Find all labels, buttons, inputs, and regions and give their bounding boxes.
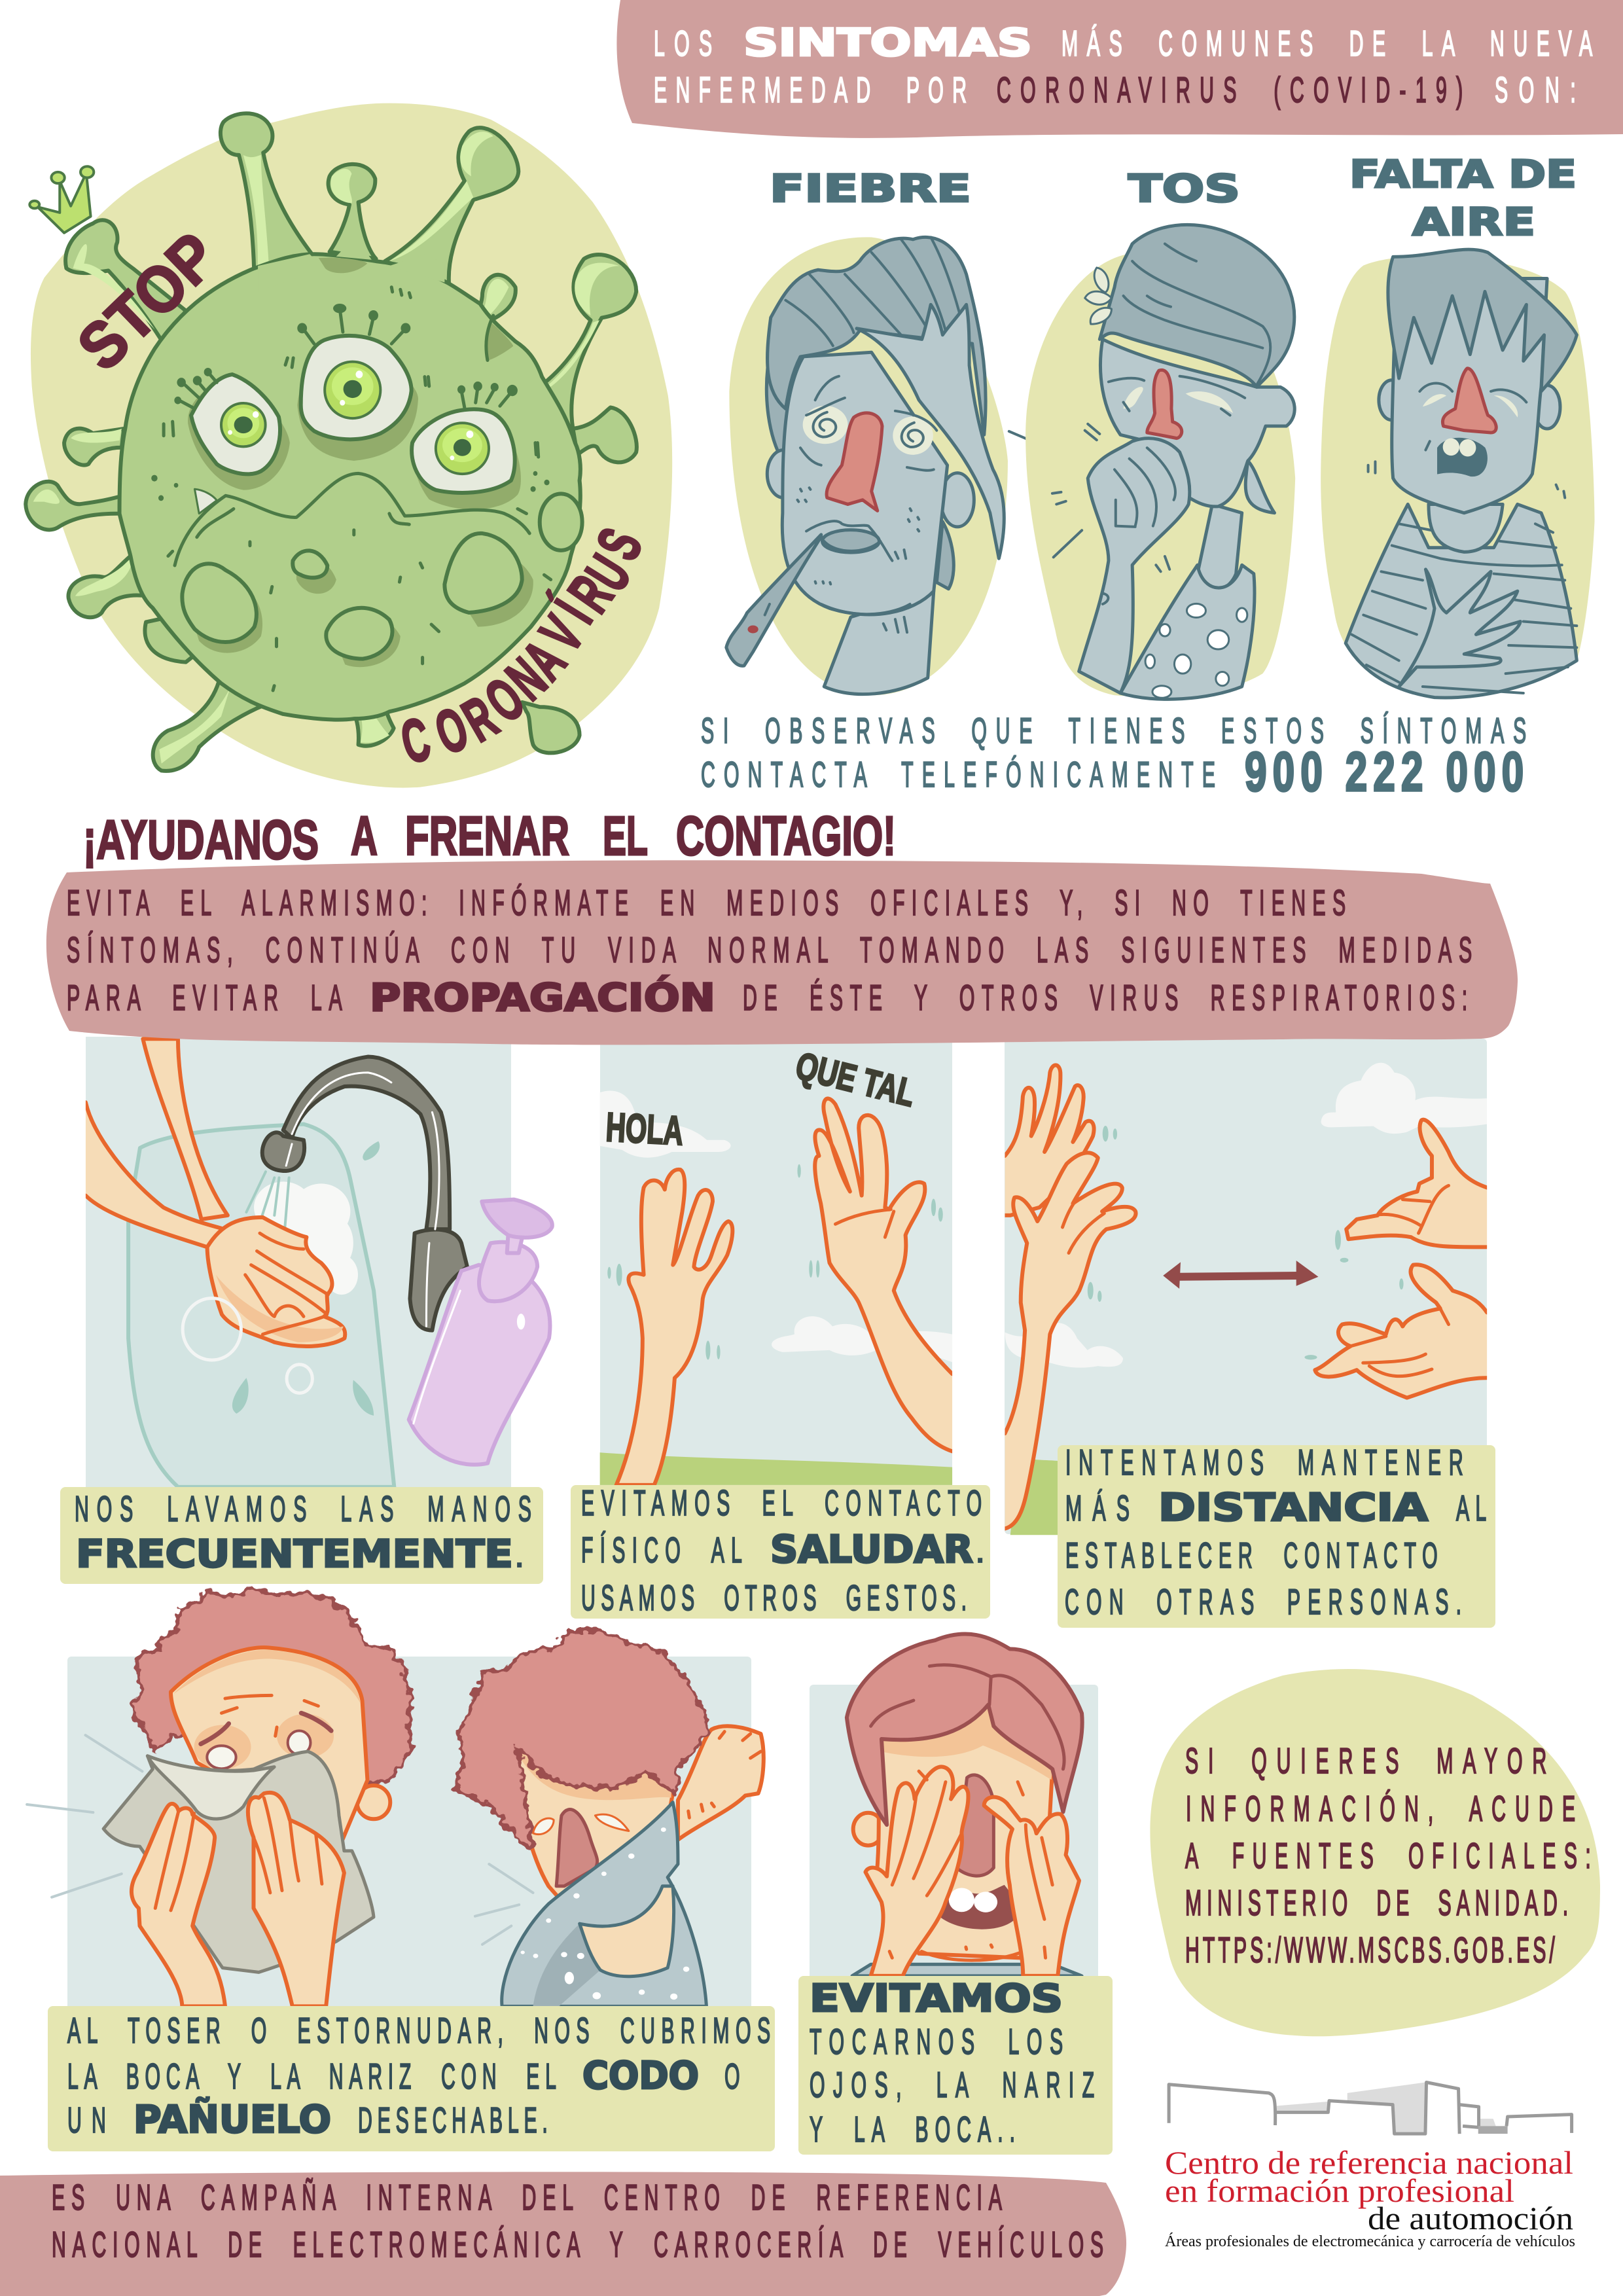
caption: evitamos el contacto: . xyxy=(975,1530,985,1570)
heading: fiebre: FIEBRE xyxy=(770,166,971,211)
caption: toser xyxy=(48,2006,775,2151)
eyelashes xyxy=(174,304,518,408)
title: CORONAVIRUS: O xyxy=(473,665,537,736)
panel: symptom faces xyxy=(726,224,1595,699)
call to action xyxy=(701,711,1526,802)
caption: distancia xyxy=(1058,1443,1495,1628)
palm line xyxy=(835,1210,894,1237)
person two fist lines xyxy=(688,1732,760,1818)
title: CORONAVIRUS xyxy=(395,519,655,777)
spiral eyes xyxy=(803,406,933,455)
title: STOP: STOP xyxy=(64,219,232,384)
info text: MINISTERIO DE SANIDAD. xyxy=(1185,1884,1568,1923)
lower arm xyxy=(76,1102,224,1247)
grass xyxy=(1010,1457,1069,1535)
clouds xyxy=(600,1091,952,1362)
speed lines xyxy=(27,1735,533,1945)
header line two: CORONAVIRUS (COVID-19) xyxy=(997,71,1463,110)
info text: HTTPS:/WWW.MSCBS.GOB.ES/ xyxy=(1185,1931,1555,1970)
foam xyxy=(254,1181,358,1295)
bubbles xyxy=(183,1299,312,1393)
dress xyxy=(1120,565,1255,699)
caption: toser: DESECHABLE. xyxy=(358,2101,548,2140)
breath marks xyxy=(1368,441,1565,497)
banner shape xyxy=(0,2172,1126,2296)
person one eyes xyxy=(194,1695,334,1769)
virus mouth fold xyxy=(168,509,526,556)
eye shadows xyxy=(188,344,521,509)
hair tail xyxy=(1245,461,1274,513)
panel: saludar xyxy=(571,1041,990,1619)
heading: ayudanos a frenar: EL xyxy=(603,805,648,867)
wash illustration xyxy=(76,1039,552,1487)
caption: lavamos las manos: NOS LAVAMOS LAS MANOS xyxy=(75,1490,531,1529)
hand on forehead xyxy=(857,304,1004,558)
shirt arm shadow xyxy=(533,1924,600,2006)
virus background blob xyxy=(31,103,672,788)
ears xyxy=(1379,380,1560,429)
person two nose xyxy=(556,1810,597,1886)
symptom headings xyxy=(770,152,1577,244)
virus freckles xyxy=(151,471,550,501)
right top hand lines xyxy=(1380,1185,1448,1233)
double arrow xyxy=(1163,1261,1318,1289)
title: CORONAVIRUS: R xyxy=(556,564,626,624)
title: CORONAVIRUS: A xyxy=(510,628,579,692)
arms and hands clipped to panel xyxy=(993,1065,1495,1529)
blob shape xyxy=(1150,1669,1600,2036)
nose xyxy=(956,1775,993,1876)
washing hands xyxy=(207,1217,345,1346)
virus tooth xyxy=(194,489,217,514)
logo xyxy=(1165,2082,1575,2250)
ear xyxy=(853,1813,883,1846)
cough illustration xyxy=(27,1588,764,2006)
panel: evitar tocarse xyxy=(798,1634,1113,2155)
virus mouth xyxy=(175,473,529,565)
hair xyxy=(768,237,986,435)
nose xyxy=(1442,368,1496,433)
person two face xyxy=(512,1736,673,1928)
panel: lavado de manos xyxy=(60,1037,552,1584)
faucet xyxy=(262,1057,467,1331)
banner text line one: EVITA EL ALARMISMO: INFÓRMATE EN MEDIOS OFICIALES Y, SI NO TIENES xyxy=(67,884,1346,923)
sink xyxy=(128,1124,394,1487)
neck xyxy=(1429,504,1503,552)
logo text: de automoción xyxy=(1368,2200,1573,2236)
logo building xyxy=(1169,2082,1572,2134)
shirt xyxy=(1346,504,1577,698)
caption: distancia: DISTANCIA xyxy=(1158,1485,1428,1530)
logo text: Centro de referencia nacional xyxy=(1165,2144,1573,2181)
finger lines xyxy=(892,1782,1052,1919)
caption: evitamos tocarnos: Y LA BOCA.. xyxy=(810,2110,1015,2149)
eyes xyxy=(1419,384,1526,418)
mouth xyxy=(938,1885,1017,1929)
freckles xyxy=(797,488,919,632)
title: CORONAVIRUS: U xyxy=(573,544,644,602)
face marks xyxy=(889,1771,1046,1958)
thermometer xyxy=(726,535,821,666)
hair strands xyxy=(785,238,969,352)
heading: ayudanos a frenar xyxy=(83,805,896,870)
person two raised arm xyxy=(678,1726,764,1840)
head xyxy=(782,352,948,615)
banner text line three: PROPAGACIÓN xyxy=(370,975,715,1020)
caption: distancia: MÁS xyxy=(1065,1489,1130,1528)
greeting illustration xyxy=(600,1091,964,1485)
virus spikes xyxy=(26,113,637,771)
caption: evitamos el contacto: SALUDAR xyxy=(770,1527,973,1571)
header line one: LOS xyxy=(654,24,712,63)
right hand xyxy=(815,1098,964,1451)
right eye xyxy=(412,409,515,493)
hand on chest xyxy=(1399,569,1520,687)
hair xyxy=(1388,249,1577,391)
head xyxy=(1100,339,1294,507)
heading: ayudanos a frenar: FRENAR xyxy=(405,805,569,867)
caption: evitamos tocarnos: TOCARNOS LOS xyxy=(810,2022,1063,2062)
hair xyxy=(1099,224,1294,387)
virus surface marks xyxy=(164,287,551,691)
back hand xyxy=(998,1065,1094,1215)
title: CORONAVIRUS: R xyxy=(452,683,508,755)
person two shirt xyxy=(502,1803,706,2006)
virus bump xyxy=(540,493,582,550)
caption: toser: PAÑUELO xyxy=(134,2096,331,2142)
banner line two: NACIONAL DE ELECTROMECÁNICA Y CARROCERÍA DE VEHÍCULOS xyxy=(52,2225,1103,2265)
background blob xyxy=(1026,253,1295,697)
crown xyxy=(29,166,94,233)
face xyxy=(876,1705,1052,1958)
caption: evitamos el contacto: EVITAMOS EL CONTACTO xyxy=(581,1484,982,1523)
banner line one: ES UNA CAMPAÑA INTERNA DEL CENTRO DE REFERENCIA xyxy=(52,2177,1002,2217)
caption: evitamos el contacto xyxy=(571,1484,990,1619)
caption: distancia: CON OTRAS PERSONAS. xyxy=(1065,1583,1461,1622)
person one forehead shadow xyxy=(173,1650,360,1703)
logo text: Áreas profesionales de electromecánica y carrocería de vehículos xyxy=(1165,2233,1575,2250)
info text: A FUENTES OFICIALES: xyxy=(1185,1837,1591,1876)
title: CORONAVIRUS: N xyxy=(494,645,559,713)
mouth xyxy=(1438,438,1487,476)
left hand xyxy=(865,1767,968,1976)
banner text line three: PARA EVITAR LA xyxy=(67,978,342,1018)
header line one: MÁS COMUNES DE LA NUEVA xyxy=(1061,24,1593,63)
title: CORONAVIRUS: V xyxy=(527,605,597,663)
finger lines xyxy=(245,1233,328,1335)
front hand and arm xyxy=(993,1153,1136,1529)
heading: ayudanos a frenar: CONTAGIO! xyxy=(676,805,896,867)
center eye xyxy=(301,336,412,439)
right bottom hand xyxy=(1315,1265,1495,1398)
motion marks xyxy=(607,1164,943,1359)
left eye xyxy=(191,374,280,474)
right top hand xyxy=(1346,1120,1495,1247)
virus eyes xyxy=(174,304,521,509)
person one face xyxy=(171,1647,367,1842)
header line two: ENFERMEDAD POR xyxy=(654,71,967,110)
panel background xyxy=(1005,1039,1487,1534)
chin xyxy=(921,1952,1023,1960)
water streams xyxy=(246,1172,289,1259)
caption: evitamos el contacto: USAMOS OTROS GESTOS. xyxy=(581,1579,967,1618)
title: CORONAVIRUS: C xyxy=(395,705,437,777)
person one right hand xyxy=(248,1793,344,2006)
cough line xyxy=(1009,431,1076,460)
eyes closed xyxy=(1109,376,1245,415)
banner shape xyxy=(616,0,1623,138)
text: contacta: CONTACTA TELEFÓNICAMENTE xyxy=(701,755,1215,795)
panel background xyxy=(67,1657,751,2010)
mouth xyxy=(806,521,892,561)
finger lines xyxy=(1063,1202,1104,1253)
person one finger lines xyxy=(155,1798,322,1910)
forehead shadow xyxy=(883,1705,1052,1780)
caption: evitamos tocarnos: EVITAMOS xyxy=(810,1976,1063,2020)
text: si observas: SI OBSERVAS QUE TIENES ESTOS SÍNTOMAS xyxy=(701,711,1526,751)
neck xyxy=(1198,504,1242,590)
ears and back hair xyxy=(766,348,974,589)
panel: distancia xyxy=(993,1039,1495,1628)
person two neckline xyxy=(580,1886,674,1977)
face touching illustration xyxy=(847,1634,1082,1976)
caption: distancia: ESTABLECER CONTACTO xyxy=(1065,1536,1438,1575)
caption: lavamos las manos: FRECUENTEMENTE xyxy=(76,1532,513,1576)
fist finger lines xyxy=(1103,448,1175,604)
grass xyxy=(600,1452,952,1485)
caption: toser: AL TOSER O ESTORNUDAR, NOS CUBRIMOS xyxy=(67,2011,770,2051)
heading: falta de aire: FALTA DE xyxy=(1349,152,1577,196)
person two hair xyxy=(455,1630,709,1851)
shirt collar xyxy=(852,1964,1082,1976)
virus body xyxy=(120,254,580,720)
banner text line two: SÍNTOMAS, CONTINÚA CON TU VIDA NORMAL TOMANDO LAS SIGUIENTES MEDIDAS xyxy=(67,931,1472,970)
upper arm xyxy=(143,1039,228,1219)
virus spike roots covering the outline xyxy=(258,247,513,360)
title: CORONAVIRUS: S xyxy=(584,519,655,569)
phone number: 900 222 000 xyxy=(1245,741,1524,802)
clouds xyxy=(1005,1063,1487,1368)
caption: toser: UN xyxy=(67,2101,106,2140)
virus craters xyxy=(182,533,533,667)
right bottom hand lines xyxy=(1351,1308,1448,1376)
caption: toser: O xyxy=(724,2057,740,2096)
header line two xyxy=(654,71,1576,110)
panel: toser xyxy=(27,1588,775,2151)
caption: lavamos las manos xyxy=(60,1487,543,1584)
info text: INFORMACIÓN, ACUDE xyxy=(1186,1789,1575,1829)
banner text line three: DE ÉSTE Y OTROS VIRUS RESPIRATORIOS: xyxy=(743,978,1467,1018)
hair lines xyxy=(871,1665,1064,1769)
person one hair xyxy=(132,1588,412,1785)
face: falta de aire xyxy=(1321,249,1595,698)
background blob xyxy=(729,237,1008,695)
motion marks xyxy=(1088,1126,1404,1359)
left hand xyxy=(616,1170,732,1485)
header banner xyxy=(616,0,1623,138)
panel background xyxy=(86,1037,511,1488)
caption: distancia: INTENTAMOS MANTENER xyxy=(1065,1443,1463,1482)
caption: distancia: AL xyxy=(1456,1489,1486,1528)
heading: falta de aire: AIRE xyxy=(1412,200,1535,244)
motion marks xyxy=(1052,424,1169,571)
caption: toser: LA BOCA Y LA NARIZ CON EL xyxy=(67,2057,556,2096)
panel background xyxy=(600,1041,952,1486)
header line one: SINTOMAS xyxy=(743,20,1032,65)
nose xyxy=(827,413,882,511)
heading: ayudanos a frenar: ¡AYUDANOS xyxy=(83,809,319,870)
person one left hand xyxy=(132,1804,225,2006)
middle banner xyxy=(46,860,1518,1045)
person two forehead shadow xyxy=(518,1745,671,1800)
water drops xyxy=(232,1141,380,1416)
info text xyxy=(1185,1742,1591,1970)
person one ear xyxy=(357,1785,390,1819)
background blob xyxy=(1321,256,1595,694)
flower xyxy=(1085,268,1111,324)
caption: toser: CODO xyxy=(582,2053,699,2098)
tissue xyxy=(103,1751,374,1972)
bottom banner xyxy=(0,2172,1126,2296)
arms xyxy=(76,1039,228,1247)
caption: lavamos las manos: . xyxy=(514,1534,524,1575)
head xyxy=(1392,279,1547,513)
caption: evitamos tocarnos xyxy=(798,1976,1113,2155)
panel background xyxy=(810,1685,1098,1979)
arm and fist xyxy=(1079,439,1190,693)
neck xyxy=(824,591,934,694)
right hand xyxy=(984,1797,1079,1976)
face: fiebre xyxy=(726,237,1008,695)
distance illustration xyxy=(993,1063,1495,1535)
logo text xyxy=(1165,2144,1575,2250)
speech: hola: HOLA xyxy=(605,1105,685,1154)
person two eyes xyxy=(533,1814,629,1835)
banner text line three xyxy=(67,975,1467,1020)
nose xyxy=(1147,370,1182,439)
heading: falta de aire xyxy=(1349,152,1577,244)
logo text: en formación profesional xyxy=(1165,2172,1514,2209)
speech: que tal: QUE TAL xyxy=(792,1045,919,1115)
heading: ayudanos a frenar: A xyxy=(351,805,378,867)
title: CORONAVIRUS: O xyxy=(427,694,476,768)
title: CORONAVIRUS: Í xyxy=(543,589,605,634)
shirt stripes xyxy=(1351,524,1577,693)
shirt dots xyxy=(521,1827,689,2000)
brows and face lines xyxy=(800,376,936,614)
header line one xyxy=(654,20,1593,65)
hair xyxy=(847,1634,1082,1825)
hair lines xyxy=(1124,243,1270,385)
caption: evitamos el contacto: FÍSICO AL xyxy=(581,1531,742,1570)
header line two: SON: xyxy=(1495,71,1576,110)
heading: tos: TOS xyxy=(1128,166,1240,211)
banner shape xyxy=(46,860,1518,1045)
finger shadows xyxy=(216,1275,344,1342)
panel: virus illustration xyxy=(26,103,672,788)
soap bottle xyxy=(409,1200,552,1465)
info text: SI QUIERES MAYOR xyxy=(1185,1742,1546,1781)
face: tos xyxy=(1026,224,1295,699)
caption: evitamos tocarnos: OJOS, LA NARIZ xyxy=(810,2066,1094,2105)
dress flowers xyxy=(1145,603,1247,698)
info blob xyxy=(1150,1669,1600,2036)
